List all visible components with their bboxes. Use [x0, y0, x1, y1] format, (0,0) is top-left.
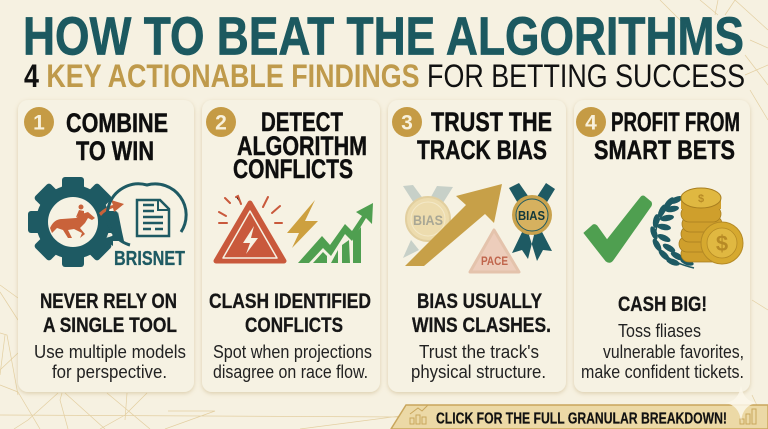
icon: medals, arrow and pace triangle: BIAS	[518, 208, 545, 223]
icon: check mark, laurel and coins: $	[716, 231, 728, 256]
step 3 badge	[392, 107, 422, 137]
text 3: BIAS USUALLY	[417, 289, 542, 313]
text 4: vulnerable favorites,	[603, 342, 744, 362]
panel: detect algorithm conflicts	[202, 100, 380, 392]
text 1: A SINGLE TOOL	[43, 313, 177, 337]
text 2: disagree on race flow.	[213, 362, 368, 382]
heading 2: DETECT	[261, 107, 343, 137]
text 4	[581, 292, 744, 382]
icon: small chart left	[410, 405, 428, 424]
heading 4: SMART BETS	[594, 135, 735, 165]
step 4 badge: 4	[585, 112, 597, 134]
text 4: Toss fliases	[618, 321, 701, 341]
text 4: make confident tickets.	[581, 362, 744, 382]
text 3	[411, 289, 551, 382]
step 3 badge: 3	[401, 112, 413, 134]
icon: medals, arrow and pace triangle	[403, 183, 555, 272]
decorative sparkle	[725, 385, 757, 421]
text 2	[209, 289, 372, 382]
step 2 badge	[206, 107, 236, 137]
icon: check mark, laurel and coins: $	[698, 193, 704, 205]
heading 2: ALGORITHM	[237, 131, 367, 161]
text 1: Use multiple models	[34, 342, 186, 362]
text 2: CLASH IDENTIFIED	[209, 289, 371, 313]
step 2 badge: 2	[215, 112, 227, 134]
heading 2: CONFLICTS	[233, 154, 353, 184]
heading 3: TRACK BIAS	[417, 135, 547, 165]
icon: check mark, laurel and coins	[584, 188, 743, 268]
heading 2	[233, 107, 367, 184]
text 4: CASH BIG!	[618, 292, 707, 316]
panel: trust the track bias	[388, 100, 566, 392]
text 1	[34, 289, 186, 382]
heading 1	[66, 108, 168, 166]
panel: profit from smart bets	[574, 100, 750, 392]
icon: medals, arrow and pace triangle: BIAS	[413, 213, 443, 228]
text 3: Trust the track's	[419, 342, 539, 362]
heading 3	[417, 107, 552, 165]
text 3: physical structure.	[411, 362, 546, 382]
text 3: WINS CLASHES.	[412, 313, 551, 337]
icon: warning triangle, lightning and rising chart	[216, 196, 373, 263]
call to action banner	[391, 405, 768, 429]
text 1: NEVER RELY ON	[40, 289, 177, 313]
icon: gear with horse and Brisnet document: BRISNET	[114, 248, 185, 270]
text 2: Spot when projections	[213, 342, 372, 362]
heading 1: COMBINE	[66, 108, 168, 138]
icon: medals, arrow and pace triangle: PACE	[481, 254, 508, 268]
step 1 badge	[24, 107, 54, 137]
heading 3: TRUST THE	[431, 107, 552, 137]
step 4 badge	[576, 107, 606, 137]
text 1: for perspective.	[52, 362, 167, 382]
icon: small chart right	[740, 409, 756, 424]
text 2: CONFLICTS	[245, 313, 343, 337]
icon: gear with horse and Brisnet document	[28, 177, 186, 270]
step 1 badge: 1	[33, 112, 45, 134]
heading 1: TO WIN	[76, 136, 154, 166]
heading 4	[594, 107, 740, 165]
panel: combine to win	[18, 100, 194, 392]
